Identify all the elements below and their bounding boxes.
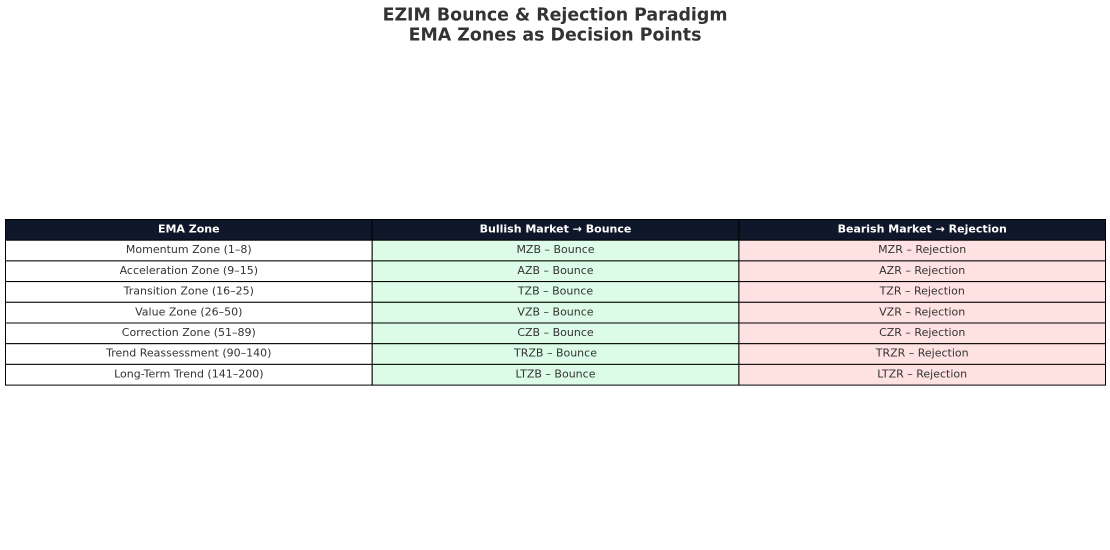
table body rows: LTZR – Rejection (877, 367, 967, 380)
table body rows: AZR – Rejection (879, 264, 965, 277)
table body rows: TZB – Bounce (517, 285, 593, 298)
table body rows: CZB – Bounce (517, 326, 594, 339)
table body rows: CZR – Rejection (879, 326, 965, 339)
title: EZIM Bounce & Rejection Paradigm (383, 6, 727, 26)
table body rows: Trend Reassessment (90–140) (105, 347, 271, 360)
table body rows: MZR – Rejection (878, 243, 966, 256)
table body rows: AZB – Bounce (517, 264, 594, 277)
table body rows: Value Zone (26–50) (135, 305, 242, 318)
table body rows: Acceleration Zone (9–15) (120, 264, 258, 277)
table body rows: Transition Zone (16–25) (123, 285, 254, 298)
header row: Bearish Market → Rejection (838, 222, 1007, 236)
header row (6, 220, 1106, 240)
table body rows: TRZB – Bounce (513, 347, 597, 360)
header row: Bullish Market → Bounce (480, 222, 631, 236)
title: EMA Zones as Decision Points (409, 26, 701, 46)
table (6, 220, 1106, 385)
table body rows: Long-Term Trend (141–200) (114, 367, 264, 380)
table body rows (6, 240, 1106, 385)
title (383, 6, 727, 46)
table body rows: MZB – Bounce (516, 243, 595, 256)
table body rows: TZR – Rejection (879, 285, 965, 298)
table body rows: VZB – Bounce (517, 305, 594, 318)
table body rows: Correction Zone (51–89) (122, 326, 256, 339)
table body rows: LTZB – Bounce (516, 367, 596, 380)
table body rows: Momentum Zone (1–8) (126, 243, 252, 256)
header row: EMA Zone (158, 222, 220, 236)
table body rows: TRZR – Rejection (875, 347, 969, 360)
table body rows: VZR – Rejection (879, 305, 965, 318)
